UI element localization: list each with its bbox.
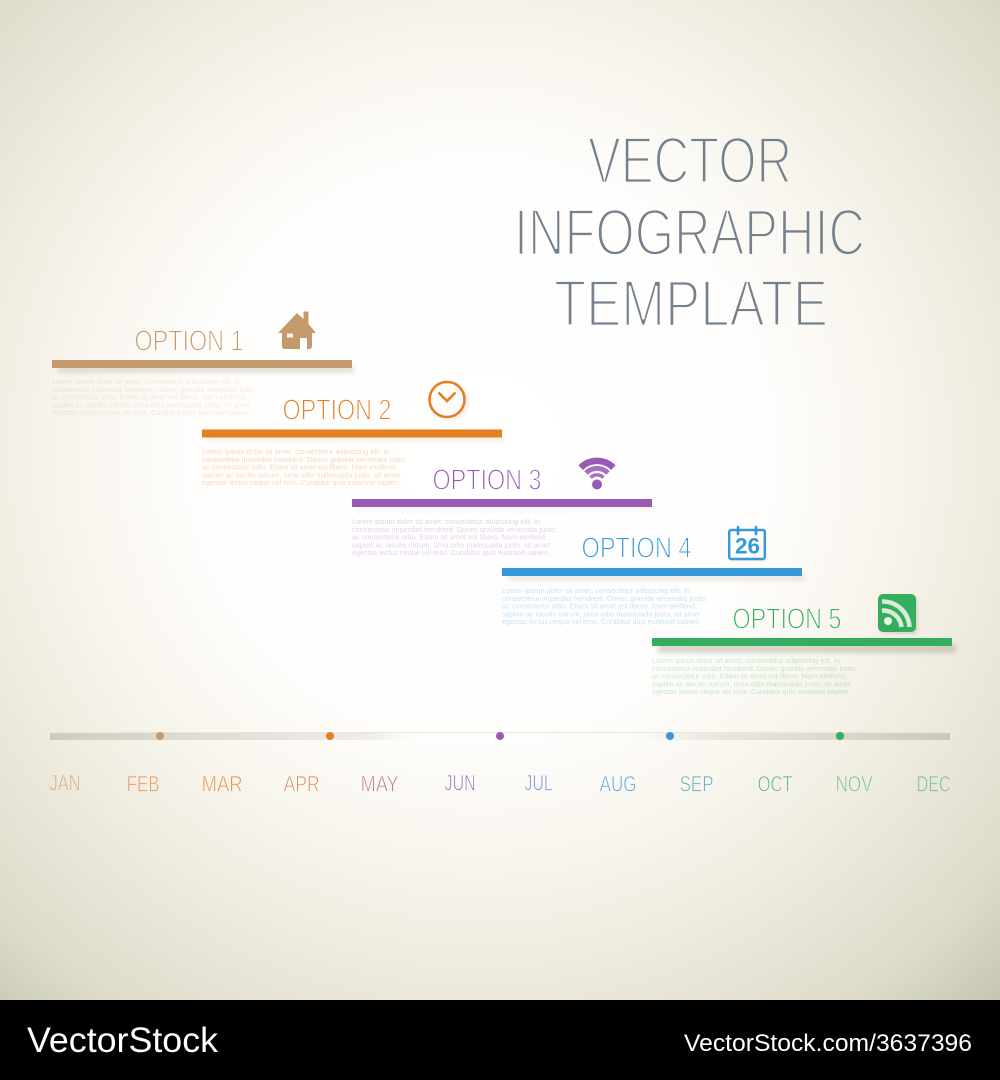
- text block: ac consectetur odio. Etiam sit amet est libero. Nam eleifend,: [202, 462, 397, 472]
- text block: Lorem ipsum dolor sit amet, consectetur adipiscing elit. In: [202, 447, 390, 456]
- month labels: SEP: [680, 771, 714, 796]
- heading: option 5: OPTION 5: [732, 604, 842, 636]
- month labels: JUL: [525, 770, 553, 795]
- text block: sapien ac iaculis rutrum, urna odio malesuada justo, sit amet: [502, 610, 700, 618]
- text block: [52, 377, 257, 417]
- text block: consectetur imperdiet hendrerit. Donec gravida venenatis justo,: [202, 455, 407, 464]
- text block: [202, 447, 407, 487]
- footer logo: VectorStock: [27, 1021, 219, 1060]
- title: INFOGRAPHIC: [514, 195, 865, 269]
- icon: calendar: 26: [735, 534, 760, 558]
- footer image id: VectorStock.com/3637396: [684, 1030, 972, 1057]
- text block: egestas lectus neque vel eros. Curabitur quis euismod sapien.: [202, 478, 400, 487]
- text block: sapien ac iaculis rutrum, urna odio malesuada justo, sit amet: [202, 470, 400, 480]
- bar: [652, 638, 952, 646]
- timeline marker: option 1: [156, 732, 164, 740]
- text block: consectetur imperdiet hendrerit. Donec gravida venenatis justo,: [652, 664, 857, 673]
- month labels: FEB: [127, 771, 160, 796]
- heading: option 3: OPTION 3: [432, 464, 542, 496]
- text block: egestas lectus neque vel eros. Curabitur quis euismod sapien.: [502, 617, 700, 626]
- heading: option 4: OPTION 4: [582, 532, 692, 564]
- text block: Lorem ipsum dolor sit amet, consectetur adipiscing elit. In: [52, 377, 240, 386]
- panel: option 4: [502, 527, 806, 626]
- text block: Lorem ipsum dolor sit amet, consectetur adipiscing elit. In: [652, 656, 840, 665]
- text block: [652, 656, 857, 696]
- text block: consectetur imperdiet hendrerit. Donec gravida venenatis justo,: [352, 525, 557, 534]
- bar: [502, 568, 802, 576]
- bar: [52, 360, 352, 368]
- bar: [352, 499, 652, 507]
- icon: rss: [878, 594, 918, 634]
- text block: Lorem ipsum dolor sit amet, consectetur adipiscing elit. In: [352, 517, 540, 526]
- month labels: JAN: [50, 770, 81, 795]
- title: VECTOR: [588, 123, 792, 197]
- text block: ac consectetur odio. Etiam sit amet est libero. Nam eleifend,: [652, 672, 847, 680]
- icon: wifi: [581, 461, 613, 490]
- heading: option 1: OPTION 1: [134, 326, 244, 358]
- bar shadow: [58, 366, 354, 373]
- icon: house: [278, 312, 316, 349]
- month labels: DEC: [917, 771, 951, 796]
- text block: Lorem ipsum dolor sit amet, consectetur adipiscing elit. In: [502, 586, 690, 595]
- month labels: JUN: [445, 770, 476, 795]
- timeline marker: option 5: [836, 732, 844, 740]
- month labels: MAY: [361, 771, 399, 796]
- text block: egestas lectus neque vel eros. Curabitur quis euismod sapien.: [352, 548, 550, 557]
- bar shadow: [358, 506, 654, 511]
- title: [514, 123, 865, 340]
- timeline marker: option 2: [326, 732, 334, 740]
- text block: sapien ac iaculis rutrum, urna odio malesuada justo, sit amet: [352, 540, 550, 550]
- panel: option 1: [52, 312, 354, 417]
- month labels: NOV: [836, 771, 873, 796]
- text block: [352, 517, 557, 557]
- month labels: MAR: [202, 771, 243, 796]
- bar shadow: [658, 644, 956, 653]
- month labels: APR: [284, 771, 320, 796]
- heading: option 2: OPTION 2: [282, 394, 392, 426]
- text block: consectetur imperdiet hendrerit. Donec gravida venenatis justo,: [52, 385, 257, 394]
- timeline marker: option 3: [496, 732, 504, 740]
- text block: ac consectetur odio. Etiam sit amet est libero. Nam eleifend,: [352, 532, 547, 542]
- bar: [202, 430, 502, 438]
- bar shadow: [508, 575, 806, 581]
- month labels: AUG: [600, 771, 637, 796]
- panel: option 5: [652, 594, 956, 696]
- text block: consectetur imperdiet hendrerit. Donec gravida venenatis justo,: [502, 594, 707, 603]
- footer band: [0, 1000, 1000, 1080]
- icon: calendar: [729, 527, 766, 560]
- text block: ac consectetur odio. Etiam sit amet est libero. Nam eleifend,: [502, 602, 697, 610]
- panel: option 2: [202, 382, 504, 487]
- month labels: OCT: [758, 771, 793, 796]
- text block: [502, 586, 707, 626]
- text block: egestas lectus neque vel eros. Curabitur quis euismod sapien.: [652, 687, 850, 696]
- month labels: [50, 770, 951, 796]
- text block: ac consectetur odio. Etiam sit amet est libero. Nam eleifend,: [52, 392, 247, 402]
- title: TEMPLATE: [554, 266, 828, 340]
- text block: sapien ac iaculis rutrum, urna odio malesuada justo, sit amet: [52, 400, 250, 410]
- timeline: [50, 732, 950, 740]
- text block: egestas lectus neque vel eros. Curabitur quis euismod sapien.: [52, 408, 250, 417]
- text block: sapien ac iaculis rutrum, urna odio malesuada justo, sit amet: [652, 680, 850, 688]
- bar shadow: [208, 436, 504, 441]
- icon: clock: [430, 382, 467, 419]
- panel: option 3: [352, 461, 654, 557]
- timeline marker: option 4: [666, 732, 674, 740]
